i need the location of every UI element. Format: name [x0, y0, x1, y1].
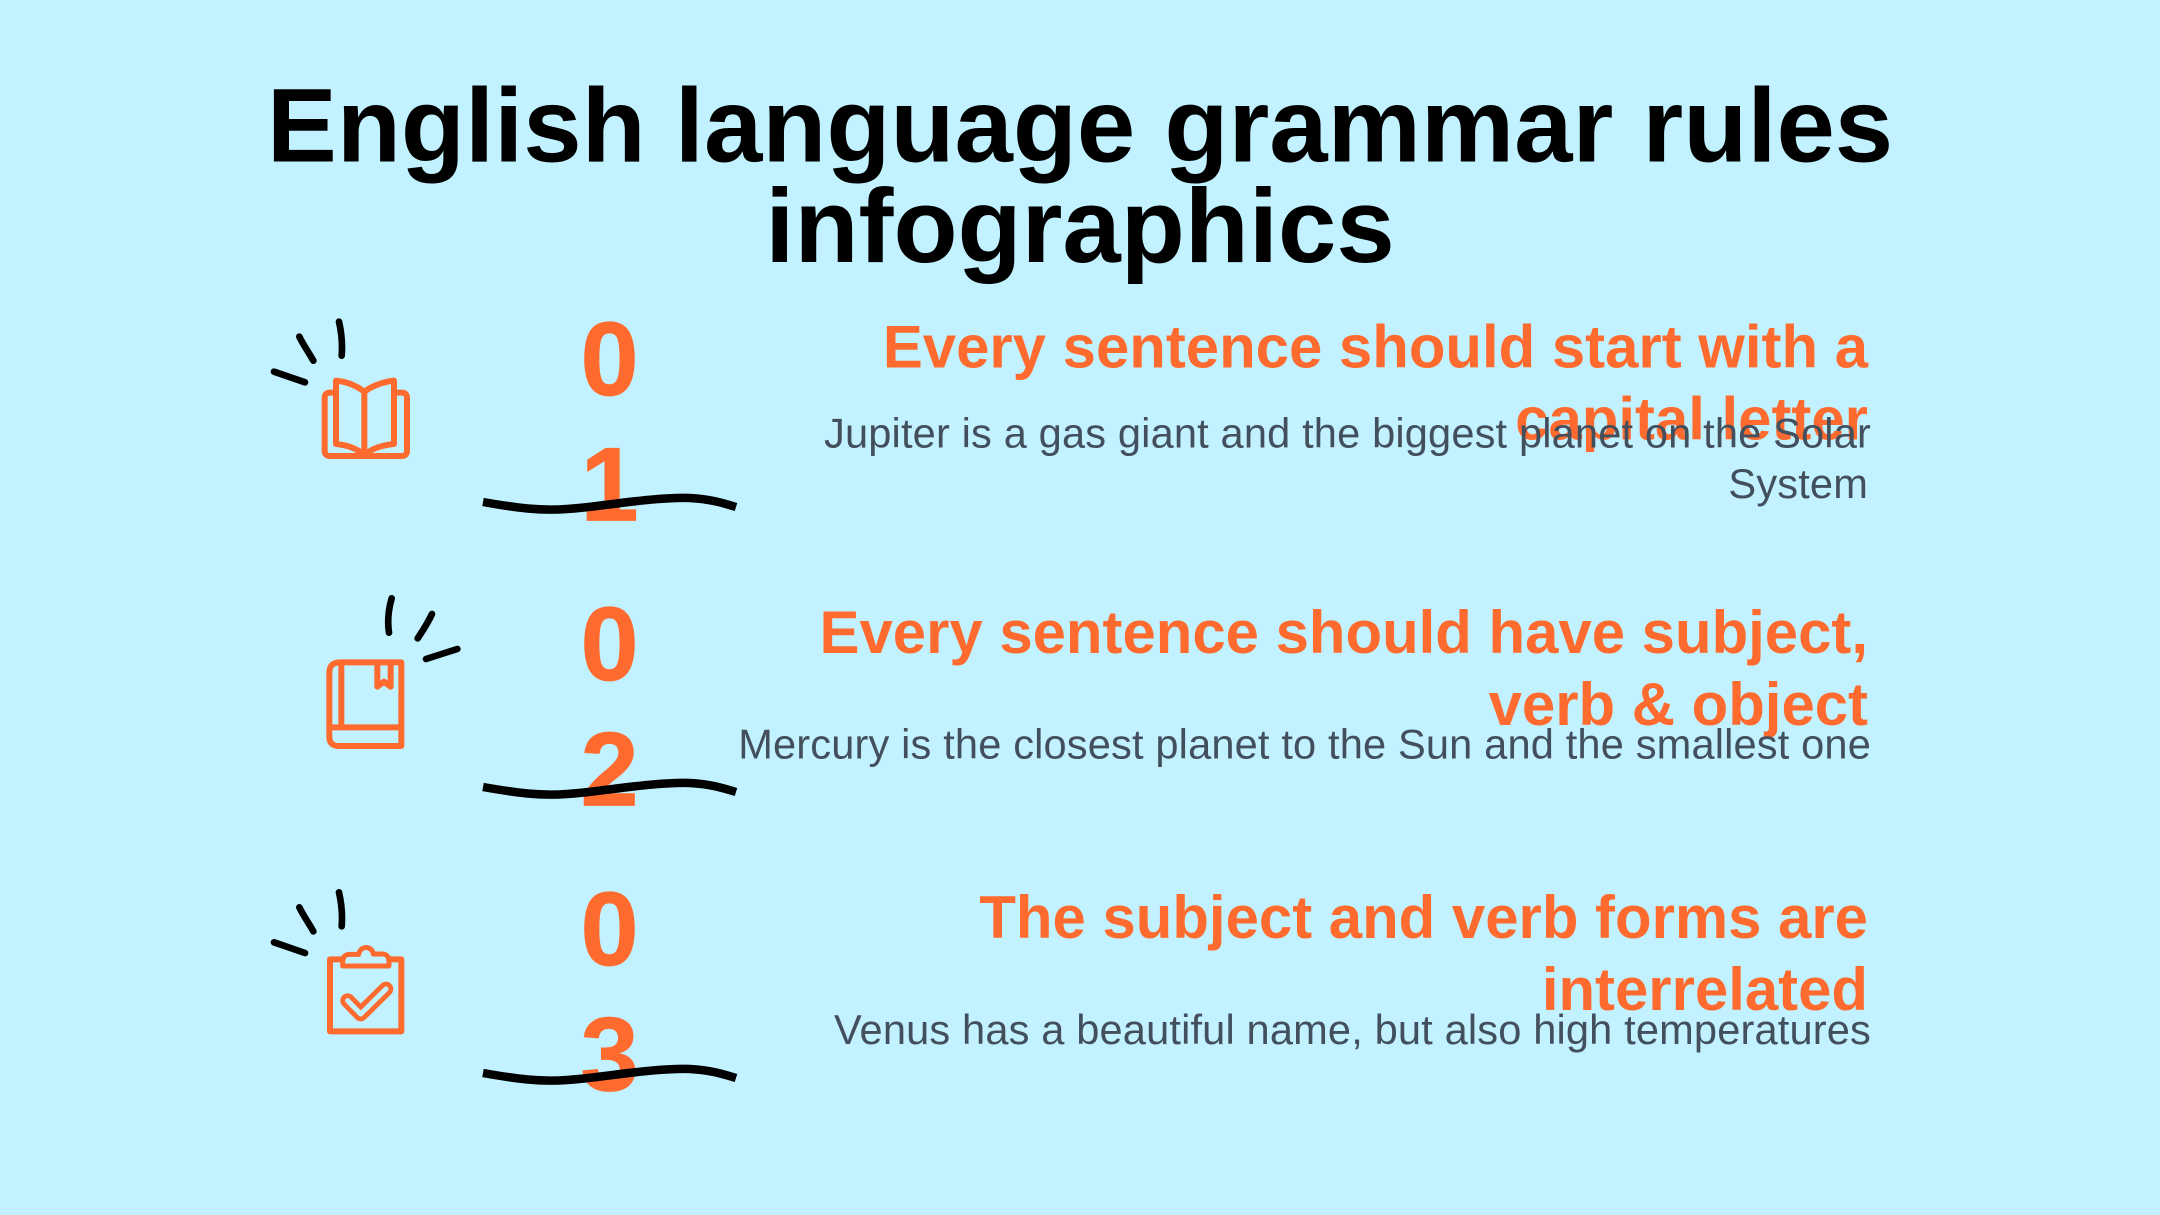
heading: verb & object: [1489, 671, 1868, 738]
title: English language grammar rules: [267, 68, 1893, 184]
description: Jupiter is a gas giant and the biggest planet on the Solar: [824, 410, 1871, 456]
icon: closed book with sparks: [329, 598, 457, 746]
wavy underline: [483, 1069, 736, 1081]
description: Mercury is the closest planet to the Sun and the smallest one: [738, 720, 1871, 768]
icon: clipboard with check and sparks: [274, 892, 401, 1031]
title: [267, 68, 1893, 285]
description: Venus has a beautiful name, but also high temperatures: [834, 1006, 1871, 1053]
heading: [979, 884, 1868, 1023]
heading: Every sentence should start with a: [883, 314, 1869, 381]
icon: open book with sparks: [274, 322, 407, 456]
heading: The subject and verb forms are: [979, 884, 1868, 951]
heading: capital letter: [1515, 386, 1868, 453]
panel: rule 3: [274, 871, 1871, 1114]
number 02: 0: [580, 586, 639, 703]
number 01: 0: [580, 301, 639, 418]
number 02: [580, 586, 639, 828]
heading: Every sentence should have subject,: [820, 599, 1868, 666]
number 02: 2: [580, 712, 639, 828]
heading: [820, 599, 1868, 738]
heading: [883, 314, 1869, 453]
number 03: 3: [580, 996, 639, 1114]
wavy underline: [483, 783, 736, 795]
panel: rule 1: [274, 301, 1871, 544]
number 03: 0: [580, 871, 639, 988]
number 01: [580, 301, 639, 544]
panel: rule 2: [329, 586, 1871, 828]
description: [824, 410, 1871, 507]
number 01: 1: [580, 426, 639, 544]
title: infographics: [765, 168, 1395, 285]
description: System: [1728, 460, 1868, 507]
wavy underline: [483, 498, 736, 510]
number 03: [580, 871, 639, 1114]
heading: interrelated: [1542, 956, 1868, 1023]
